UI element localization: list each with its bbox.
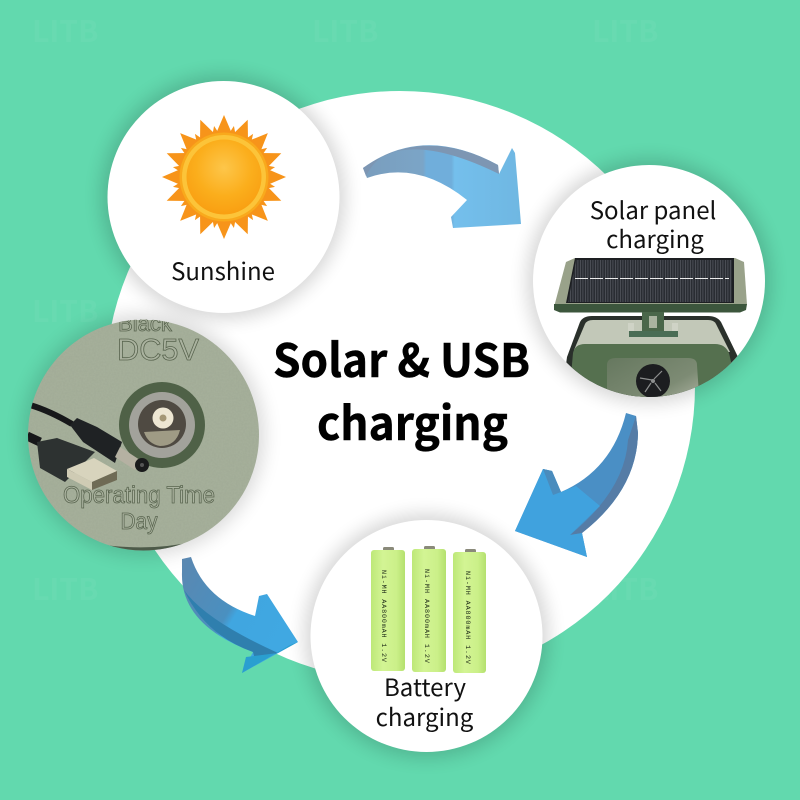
icon: USB cable and plug xyxy=(27,405,149,490)
arrow: solar panel to battery xyxy=(515,413,638,557)
title xyxy=(273,325,530,454)
central white circle xyxy=(105,91,695,681)
panel: USB charging photo xyxy=(22,311,264,556)
icon: battery 3: Ni-MH AA800mAH 1.2V xyxy=(463,571,471,665)
watermarks: LITB xyxy=(312,565,378,609)
engraved text: Day xyxy=(120,508,158,534)
icon: DC socket xyxy=(119,382,205,468)
watermarks: LITB xyxy=(312,7,378,51)
watermarks: LITB xyxy=(32,7,98,51)
watermarks: LITB xyxy=(32,565,98,609)
watermarks: LITB xyxy=(592,565,658,609)
title: Solar & USB xyxy=(273,325,530,391)
watermarks: LITB xyxy=(312,287,378,331)
icon: battery 2: Ni-MH AA800mAH 1.2V xyxy=(422,569,430,664)
icon: battery 1: Ni-MH AA800mAH 1.2V xyxy=(379,570,387,663)
engraved text xyxy=(63,311,215,534)
engraved text: Operating Time xyxy=(63,482,215,509)
icon: sun xyxy=(162,115,286,239)
icon: battery 3 xyxy=(453,549,486,673)
image: solar panel device xyxy=(554,258,748,410)
label: battery charging: Battery xyxy=(384,668,466,703)
panel: solar panel charging xyxy=(527,159,771,410)
icon: battery 1 xyxy=(371,547,405,671)
label: solar panel charging: Solar panel xyxy=(590,191,716,226)
watermarks xyxy=(32,7,658,609)
label: battery charging xyxy=(376,668,474,733)
label: battery charging: charging xyxy=(376,698,474,733)
engraved text: Black xyxy=(118,311,173,336)
watermarks: LITB xyxy=(32,287,98,331)
label: solar panel charging xyxy=(590,191,716,255)
title: charging xyxy=(317,388,508,454)
icon: battery 2 xyxy=(412,546,446,672)
label: sunshine: Sunshine xyxy=(171,252,275,287)
watermarks: LITB xyxy=(592,7,658,51)
watermarks: LITB xyxy=(592,287,658,331)
label: solar panel charging: charging xyxy=(606,220,704,255)
panel: sunshine xyxy=(101,75,345,319)
panel: battery charging xyxy=(304,514,548,758)
arrow: sunshine to solar panel xyxy=(363,145,521,228)
engraved text: DC5V xyxy=(117,332,199,367)
arrow: USB to battery xyxy=(182,557,298,673)
